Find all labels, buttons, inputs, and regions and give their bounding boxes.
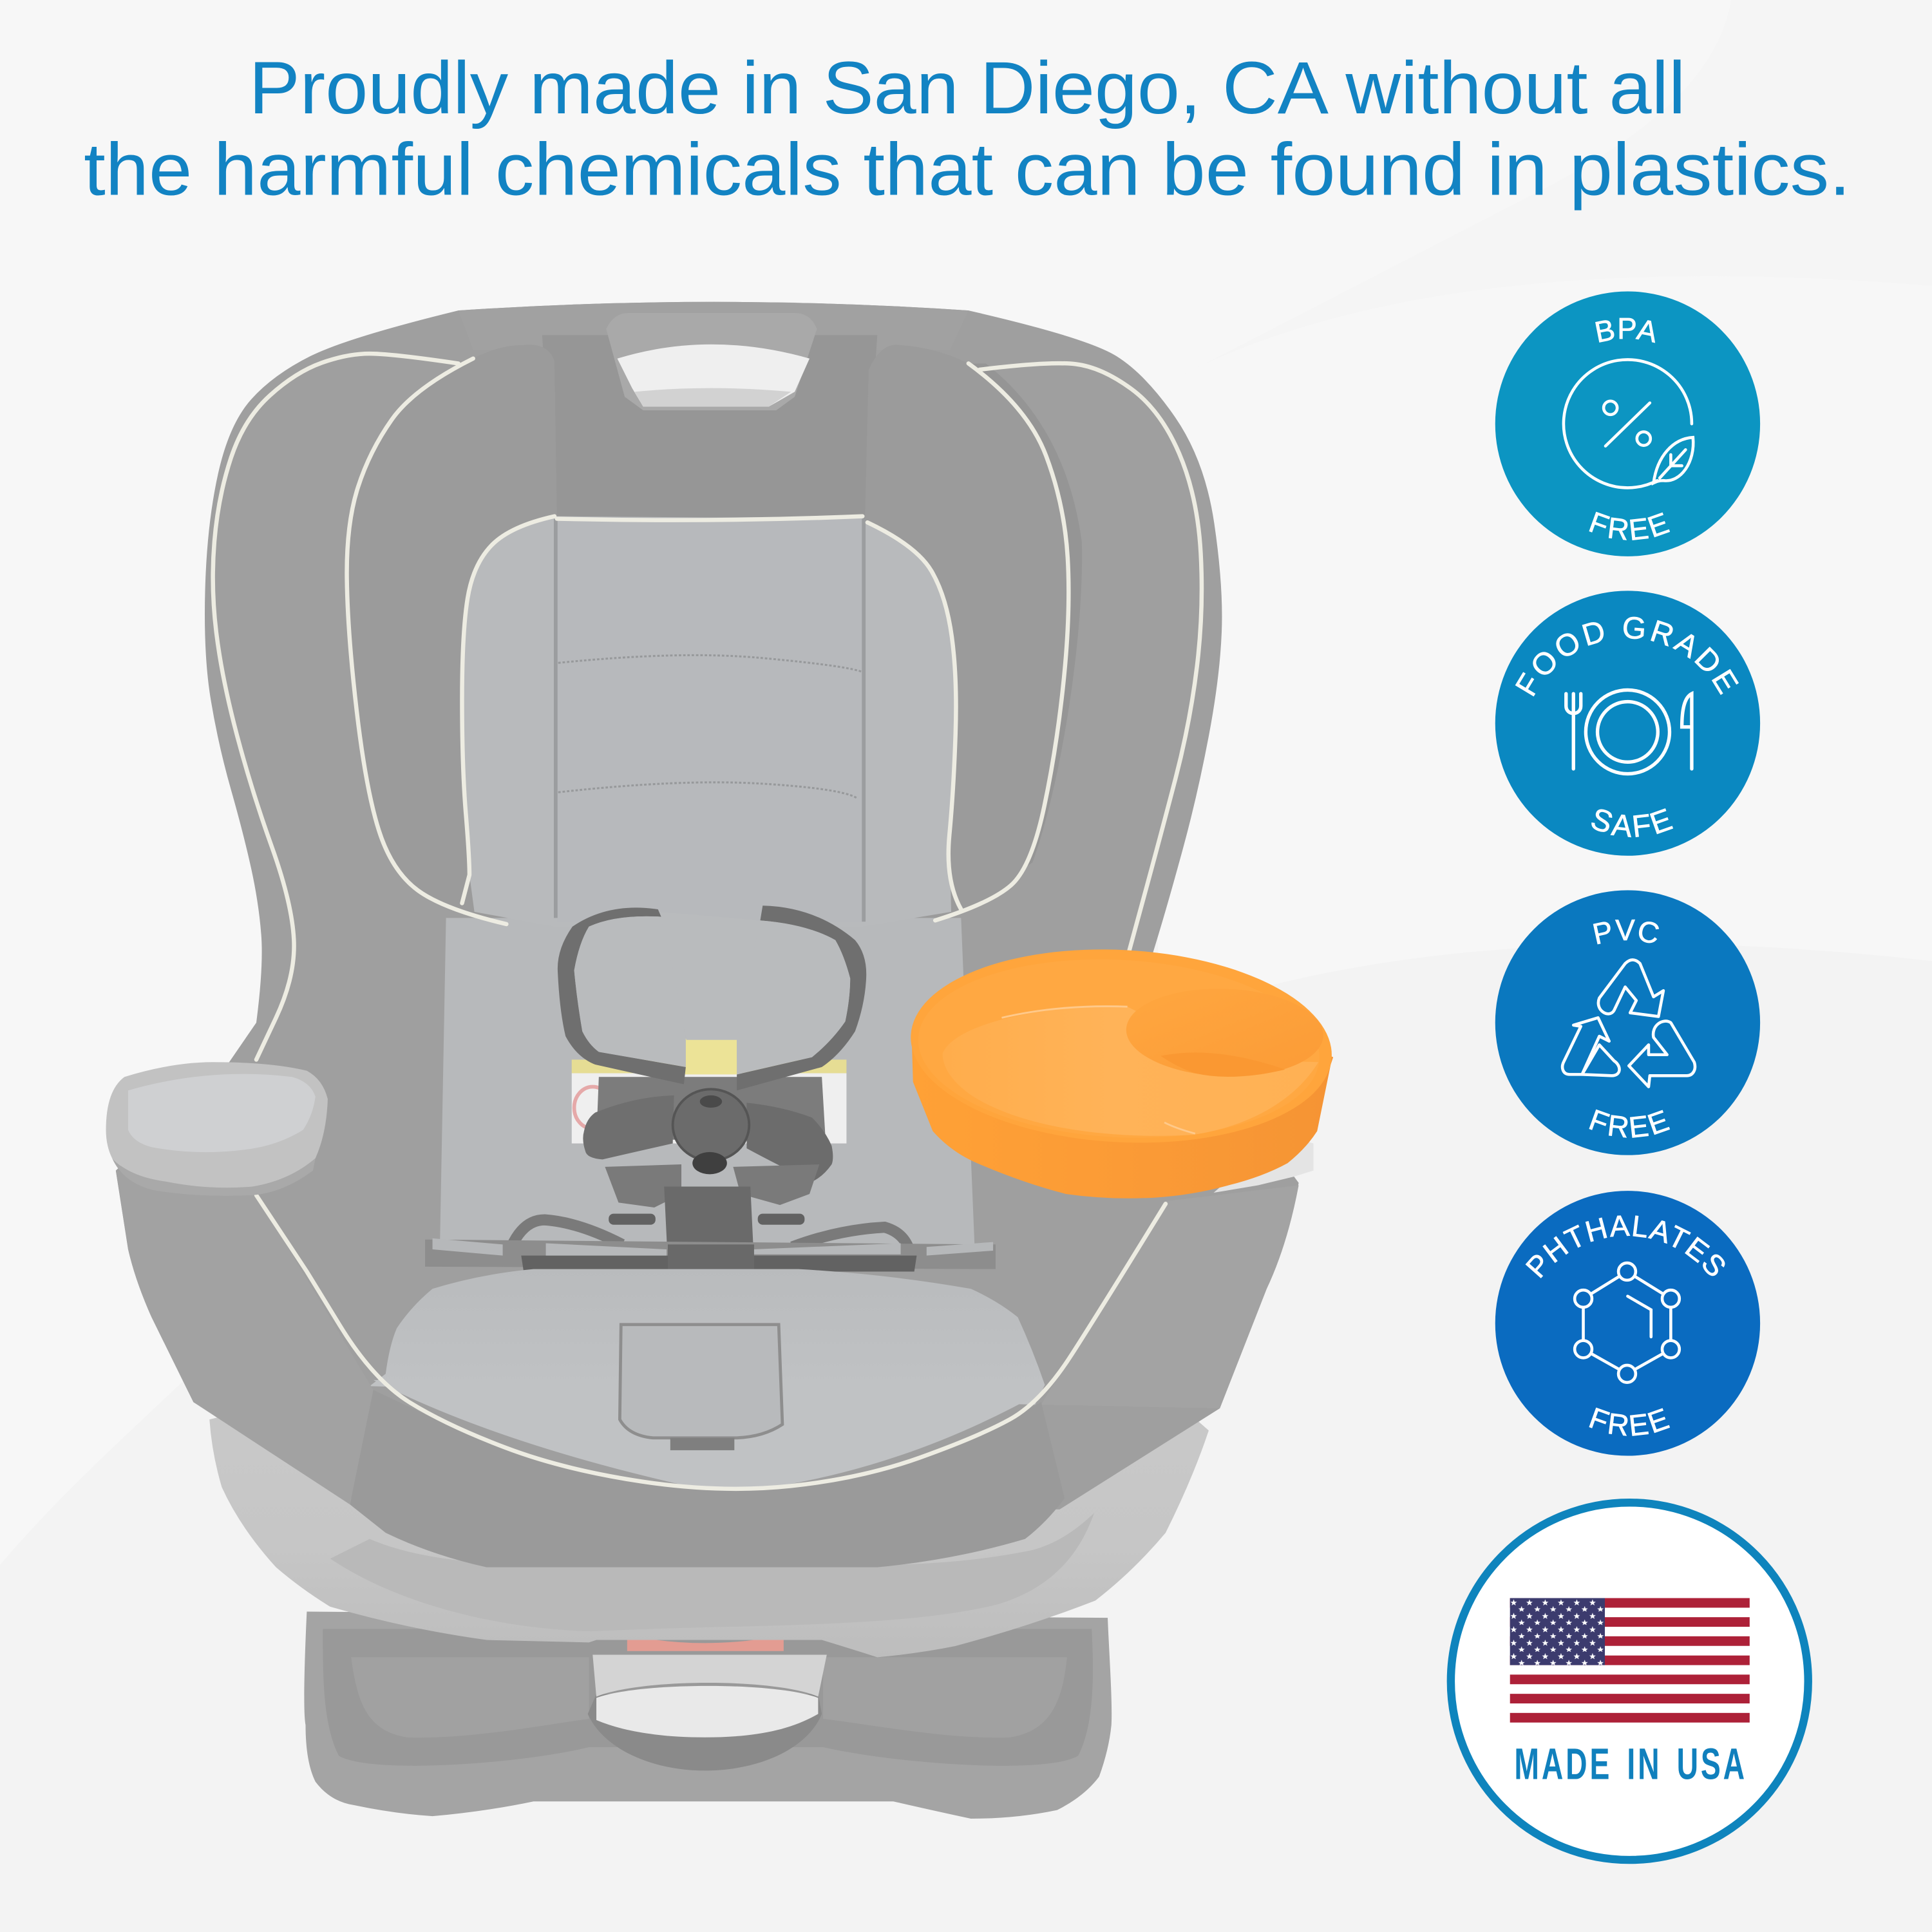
title line 1: Proudly made in San Diego, CA without all [249,47,1685,129]
safety label: rear-facing [688,1077,729,1086]
made in USA label: MADE IN USA [1514,1739,1747,1789]
crotch pad [620,1325,782,1450]
seat cushion [370,1269,1045,1405]
crotch strap [609,1186,804,1263]
left head pad [347,345,557,924]
back pad [462,516,956,927]
title line 2: the harmful chemicals that can be found in plastics. [84,128,1851,211]
badge: phthalates free: PHTHALATES [1525,1215,1725,1278]
left shoulder pad [574,916,686,1067]
center strap [659,912,760,1040]
icon: recycle arrows [1562,960,1695,1087]
plastic base shell [209,1380,1209,1657]
badge: phthalates free [1495,1191,1761,1455]
right tray mount [1214,1133,1314,1193]
left arm [116,1171,374,1504]
base front face [330,1513,1094,1631]
left cup holder [106,1062,328,1196]
right shoulder pad [737,920,850,1074]
seat shell [116,302,1299,1510]
base recess [323,1629,1093,1766]
icon: molecule [1575,1263,1680,1383]
icon: American flag [1510,1598,1750,1723]
orange snack tray [906,939,1337,1198]
tray inner wall [914,949,1324,1148]
title [84,47,1851,211]
side webbing loops [511,1220,908,1247]
badge: PVC free: FREE [1589,1109,1671,1138]
head handle [606,313,817,410]
inner wing shadow [363,363,1082,927]
icon: percent leaf [1564,359,1693,488]
right shoulder loop [737,905,866,1090]
seat lower base frame [304,1612,1112,1819]
badge: BPA free: BPA [1595,318,1655,343]
cushion lower fill [374,1380,1041,1493]
lower harness pads [605,1164,819,1208]
chest clip [583,1089,833,1182]
badges [1446,291,1812,1864]
tray rim [906,939,1337,1153]
badge: PVC free [1495,890,1761,1155]
seat front trim [350,1390,1065,1567]
safety label [572,1039,846,1144]
head support center [542,335,877,524]
top frame [459,302,969,350]
harness webbing [596,1077,826,1140]
badge: food grade safe: FOOD GRADE [1515,617,1739,697]
badge: BPA free [1495,291,1761,556]
lower center panel [440,918,974,1247]
tray body [912,1010,1333,1198]
badge: phthalates free: FREE [1589,1408,1671,1436]
base inner slope [351,1657,1067,1738]
badge: food grade safe: SAFE [1591,808,1673,837]
badge: made in USA [1451,1502,1808,1860]
recline pedal [588,1635,827,1770]
tray glints [1001,1007,1195,1133]
badge: BPA free: FREE [1589,511,1671,540]
cup holder [1124,985,1325,1080]
left shoulder loop [558,907,686,1084]
badge: food grade safe [1495,591,1761,856]
badge: PVC free: PVC [1593,920,1659,944]
right arm [1041,1186,1299,1408]
car seat [106,302,1314,1819]
icon: plate and cutlery [1566,690,1692,774]
tray floor [943,1007,1318,1136]
right head pad [865,345,1068,924]
piping lines [213,354,1202,1489]
lap bar [425,1238,996,1271]
